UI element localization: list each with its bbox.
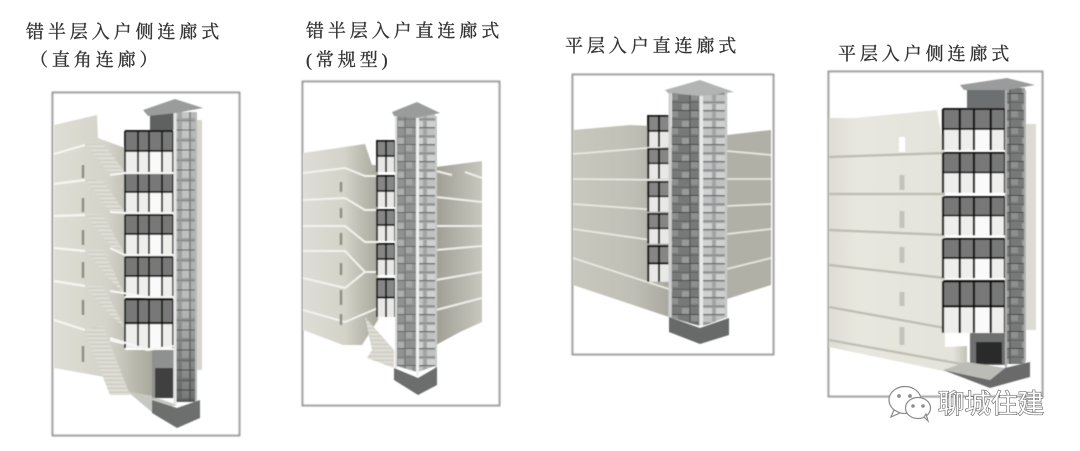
shaft columns bbox=[395, 114, 397, 368]
shaft columns bbox=[1006, 90, 1025, 370]
image frame bbox=[302, 82, 500, 406]
roof stair housing bbox=[150, 113, 174, 130]
shaft base bbox=[394, 367, 437, 395]
title: panel 2 heading: (常规型) bbox=[306, 50, 392, 71]
shaft columns bbox=[668, 92, 672, 318]
wall slots bbox=[899, 137, 905, 152]
elevator shaft left face bbox=[397, 112, 417, 372]
rear wing bbox=[196, 120, 202, 370]
icon: WeChat bubbles bbox=[889, 386, 930, 421]
shaft base bbox=[152, 400, 200, 428]
title: panel 1 heading: 错半层入户侧连廊式 bbox=[26, 22, 223, 42]
elevator shaft right face bbox=[703, 92, 725, 326]
roof cap bbox=[960, 78, 1035, 90]
right building bbox=[436, 161, 482, 345]
illustration: flat building with side corridor bbox=[829, 78, 1036, 388]
elevator shaft bbox=[1007, 88, 1025, 364]
floor slabs bbox=[829, 153, 967, 365]
illustration: building with straight corridor bbox=[303, 102, 482, 395]
illustration: building with elevator and right-angle corridor bbox=[54, 99, 203, 428]
left floor slabs bbox=[303, 168, 378, 322]
ground floor lobby bbox=[970, 333, 1007, 365]
image frame bbox=[52, 92, 240, 436]
lobby floor bbox=[943, 362, 1005, 380]
building walls bbox=[54, 115, 152, 396]
building walls bbox=[829, 110, 967, 373]
floor slabs bbox=[54, 145, 148, 350]
title: panel 2 heading: 错半层入户直连廊式 bbox=[306, 21, 503, 41]
right building bbox=[727, 130, 771, 299]
title: panel 2 heading bbox=[306, 21, 503, 71]
panel: staggered floor straight corridor bbox=[302, 82, 500, 406]
roof stair housing bbox=[967, 90, 1005, 108]
watermark text: 聊城住建 bbox=[938, 389, 1044, 419]
elevator shaft left face bbox=[672, 90, 700, 326]
glass corridor units bbox=[376, 140, 396, 172]
rear wing bbox=[1024, 124, 1036, 330]
left floor slabs bbox=[573, 146, 672, 290]
roof cap bbox=[392, 102, 440, 118]
roof cap bbox=[143, 99, 203, 116]
illustration: flat building with straight corridor bbox=[573, 80, 771, 344]
wall slots bbox=[82, 165, 84, 362]
right floor slabs bbox=[436, 171, 482, 310]
image frame bbox=[572, 74, 774, 354]
left building bbox=[303, 144, 378, 345]
panel: staggered floor side corridor bbox=[52, 92, 240, 436]
image frame bbox=[828, 72, 1042, 396]
shaft base bbox=[943, 362, 1030, 388]
right floor slabs bbox=[727, 151, 771, 269]
elevator shaft right face bbox=[418, 114, 435, 372]
lobby stair bbox=[365, 317, 394, 368]
title: panel 1 heading bbox=[26, 22, 223, 70]
staircases bbox=[84, 143, 130, 395]
watermark: WeChat account bbox=[889, 386, 1044, 421]
title: panel 3 heading: 平层入户直连廊式 bbox=[565, 36, 740, 56]
panel: flat floor straight corridor bbox=[572, 74, 774, 354]
glass corridor units bbox=[943, 108, 1005, 150]
title: panel 4 heading: 平层入户侧连廊式 bbox=[838, 44, 1013, 64]
glass corridor units bbox=[125, 130, 173, 172]
left building bbox=[573, 125, 672, 318]
elevator shaft bbox=[176, 112, 195, 402]
panel: flat floor side corridor bbox=[828, 72, 1042, 396]
shaft base bbox=[669, 317, 729, 344]
glass corridor units bbox=[647, 115, 671, 147]
corridor slabs bbox=[110, 173, 174, 350]
wall slots bbox=[340, 182, 342, 325]
title: panel 1 heading: （直角连廊） bbox=[30, 50, 161, 70]
shaft columns bbox=[174, 108, 176, 404]
ground floor lobby bbox=[128, 392, 177, 413]
roof cap bbox=[665, 80, 734, 96]
